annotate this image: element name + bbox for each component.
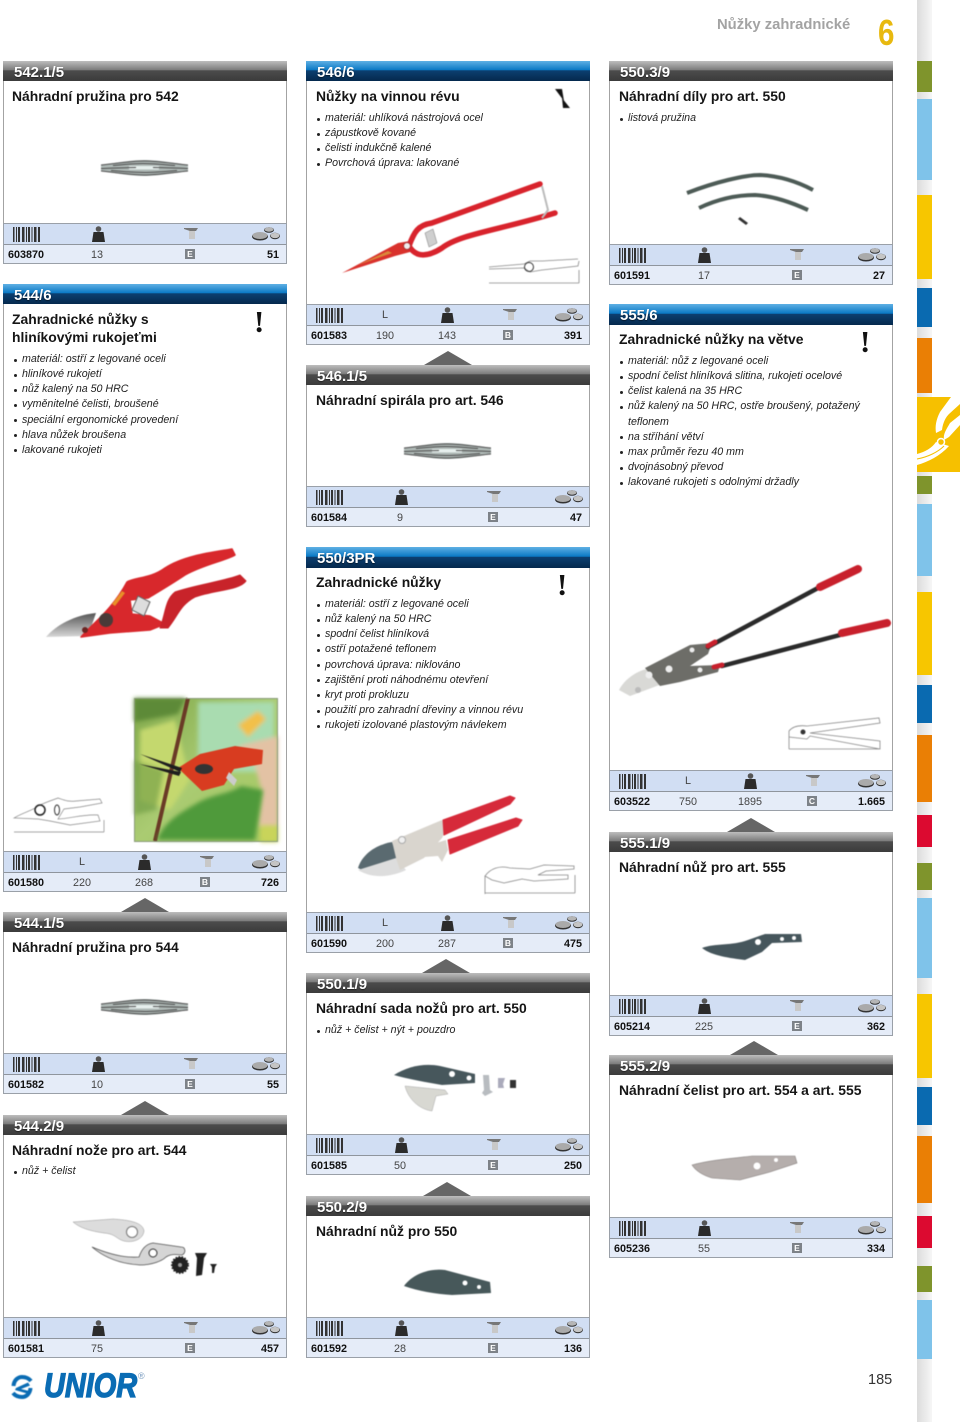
spec table: E bbox=[187, 249, 193, 259]
spec table: 601581 bbox=[8, 1343, 44, 1355]
feature list: materiál: ostří z legované oceli bbox=[22, 353, 166, 365]
header: 544.1/5 bbox=[14, 915, 64, 932]
feature list: na stříhání větví bbox=[628, 431, 704, 443]
arrow: 555.1/9 bbox=[727, 818, 775, 832]
spec table: 136 bbox=[564, 1343, 582, 1355]
spec table: 47 bbox=[570, 512, 582, 524]
arrow: 546.1/5 bbox=[424, 351, 472, 365]
spec table bbox=[609, 770, 893, 811]
feature list bbox=[14, 353, 179, 456]
spec table: 75 bbox=[91, 1343, 103, 1355]
header: 542.1/5 bbox=[14, 64, 64, 81]
spec table: 190 bbox=[376, 330, 394, 342]
title: Náhradní sada nožů pro art. 550 bbox=[316, 1000, 527, 1016]
feature list: materiál: ostří z legované oceli bbox=[325, 598, 469, 610]
spec table: B bbox=[202, 877, 208, 887]
header: 550.3/9 bbox=[620, 64, 670, 81]
header bbox=[3, 1115, 287, 1135]
feature list: ostří potažené teflonem bbox=[325, 643, 436, 655]
line drawing: loppers bbox=[788, 717, 881, 750]
spec table: 143 bbox=[438, 330, 456, 342]
feature list: materiál: uhlíková nástrojová ocel bbox=[325, 112, 483, 124]
spec table bbox=[3, 1317, 287, 1358]
header bbox=[3, 284, 287, 304]
feature list: speciální ergonomické provedení bbox=[22, 414, 178, 426]
arrow: 555.2/9 bbox=[730, 1041, 778, 1055]
header: 550.2/9 bbox=[317, 1199, 367, 1216]
header: 544.2/9 bbox=[14, 1118, 64, 1135]
feature list: nůž + čelist bbox=[22, 1165, 76, 1177]
spec table: 17 bbox=[698, 270, 710, 282]
spec table: 1895 bbox=[738, 796, 762, 808]
spec table: C bbox=[809, 796, 815, 806]
spec table: L bbox=[685, 775, 691, 787]
spec table bbox=[306, 1317, 590, 1358]
panel: 555.2/9 bbox=[609, 1055, 893, 1258]
panel: 555.1/9 bbox=[609, 832, 893, 1036]
icon: yellow chapter badge bbox=[916, 397, 960, 472]
panel: 555/6 bbox=[609, 304, 893, 811]
spec table bbox=[306, 912, 590, 953]
header: 544/6 bbox=[14, 287, 52, 304]
header: 550.1/9 bbox=[317, 976, 367, 993]
spec table: E bbox=[490, 512, 496, 522]
spec table bbox=[3, 1053, 287, 1094]
panel: 546.1/5 bbox=[306, 365, 590, 527]
spec table: 601591 bbox=[614, 270, 650, 282]
spec table: E bbox=[187, 1343, 193, 1353]
spec table: 601582 bbox=[8, 1079, 44, 1091]
spec table: 1.665 bbox=[858, 796, 885, 808]
header: 555/6 bbox=[620, 307, 658, 324]
warning icon: ! bbox=[254, 304, 264, 339]
spec table: 391 bbox=[564, 330, 582, 342]
header bbox=[306, 1196, 590, 1216]
feature list: teflonem bbox=[628, 416, 669, 428]
header bbox=[609, 832, 893, 852]
registered mark: ® bbox=[138, 1371, 145, 1381]
spec table: 268 bbox=[135, 877, 153, 889]
image: spring bbox=[403, 442, 492, 460]
photo: pruning vine bbox=[130, 694, 282, 846]
line drawing: secateurs bbox=[13, 797, 105, 833]
spec table: 362 bbox=[867, 1021, 885, 1033]
spec table: B bbox=[505, 330, 511, 340]
spec table: 50 bbox=[394, 1160, 406, 1172]
spec table: 603522 bbox=[614, 796, 650, 808]
panel: 544/6 bbox=[3, 284, 287, 892]
panel: 550.1/9 bbox=[306, 973, 590, 1175]
header: 550/3PR bbox=[317, 550, 375, 567]
panel: 550.2/9 bbox=[306, 1196, 590, 1358]
image: jaw bbox=[691, 1155, 798, 1181]
panel: 550/3PR bbox=[306, 547, 590, 953]
side navigation strip bbox=[917, 0, 932, 1422]
header bbox=[609, 61, 893, 81]
image: blade bbox=[404, 1268, 492, 1296]
image: blade parts bbox=[72, 1218, 218, 1277]
header: 555.1/9 bbox=[620, 835, 670, 852]
spec table: L bbox=[382, 309, 388, 321]
spec table: 601590 bbox=[311, 938, 347, 950]
logo mark bbox=[10, 1374, 34, 1400]
feature list: max průměr řezu 40 mm bbox=[628, 446, 744, 458]
title: Zahradnické nůžky s bbox=[12, 311, 149, 327]
feature list: zápustkově kované bbox=[325, 127, 416, 139]
spec table: E bbox=[187, 1079, 193, 1089]
arrow: 550.2/9 bbox=[423, 1182, 471, 1196]
arrow: 544.1/5 bbox=[121, 898, 169, 912]
header bbox=[609, 304, 893, 325]
feature list: materiál: nůž z legované oceli bbox=[628, 355, 768, 367]
feature list: kryt proti prokluzu bbox=[325, 689, 409, 701]
feature list: lakované rukojeti s odolnými držadly bbox=[628, 476, 799, 488]
spec table bbox=[306, 486, 590, 527]
spec table bbox=[609, 1217, 893, 1258]
warning icon: ! bbox=[557, 567, 567, 602]
spec table: 55 bbox=[698, 1243, 710, 1255]
feature list: spodní čelist hliníková bbox=[325, 628, 429, 640]
spec table: 601580 bbox=[8, 877, 44, 889]
feature list: rukojeti izolované plastovým návlekem bbox=[325, 719, 507, 731]
spec table bbox=[3, 223, 287, 264]
section heading: Nůžky zahradnické bbox=[717, 17, 850, 33]
header bbox=[306, 973, 590, 993]
spec table: 475 bbox=[564, 938, 582, 950]
spec table: 601585 bbox=[311, 1160, 347, 1172]
header: 555.2/9 bbox=[620, 1058, 670, 1075]
spec table: 605214 bbox=[614, 1021, 650, 1033]
spec table bbox=[609, 995, 893, 1036]
spec table: 603870 bbox=[8, 249, 44, 261]
spec table: 287 bbox=[438, 938, 456, 950]
spec table: 334 bbox=[867, 1243, 885, 1255]
spec table: 13 bbox=[91, 249, 103, 261]
title: Náhradní pružina pro 542 bbox=[12, 88, 179, 104]
title: Zahradnické nůžky bbox=[316, 574, 441, 590]
spec table: 750 bbox=[679, 796, 697, 808]
title: hliníkovými rukojeťmi bbox=[12, 329, 157, 345]
header bbox=[306, 365, 590, 385]
spec table: 220 bbox=[73, 877, 91, 889]
image: loppers bbox=[619, 564, 892, 696]
spec table bbox=[306, 1134, 590, 1175]
spec table: 457 bbox=[261, 1343, 279, 1355]
title: Nůžky na vinnou révu bbox=[316, 88, 460, 104]
title: Náhradní díly pro art. 550 bbox=[619, 88, 786, 104]
image: leaf springs bbox=[686, 172, 814, 226]
header bbox=[306, 547, 590, 568]
title: Náhradní nože pro art. 544 bbox=[12, 1142, 186, 1158]
feature list: dvojnásobný převod bbox=[628, 461, 723, 473]
image: spring bbox=[100, 160, 189, 176]
line drawing: pruner bbox=[484, 864, 576, 894]
spec table bbox=[306, 304, 590, 345]
feature list bbox=[317, 598, 523, 731]
image: red secateurs bbox=[46, 548, 248, 638]
feature list bbox=[317, 112, 484, 169]
title: Náhradní spirála pro art. 546 bbox=[316, 392, 504, 408]
spec table: 225 bbox=[695, 1021, 713, 1033]
spec table: E bbox=[794, 1021, 800, 1031]
spec table: 27 bbox=[873, 270, 885, 282]
page number: 185 bbox=[868, 1372, 892, 1388]
spec table: E bbox=[794, 270, 800, 280]
header: 546/6 bbox=[317, 64, 355, 81]
header bbox=[3, 912, 287, 932]
feature list: zajištění proti náhodnému otevření bbox=[325, 674, 488, 686]
spec table: L bbox=[382, 917, 388, 929]
title: Náhradní nůž pro 550 bbox=[316, 1223, 457, 1239]
header bbox=[609, 1055, 893, 1075]
title: Náhradní nůž pro art. 555 bbox=[619, 859, 786, 875]
feature list: hlava nůžek broušena bbox=[22, 429, 126, 441]
panel: 544.2/9 bbox=[3, 1115, 287, 1358]
spec table: 51 bbox=[267, 249, 279, 261]
image: blade set bbox=[394, 1064, 517, 1112]
panel: 544.1/5 bbox=[3, 912, 287, 1094]
image: spring bbox=[100, 998, 189, 1016]
title: Zahradnické nůžky na větve bbox=[619, 331, 804, 347]
header bbox=[306, 61, 590, 81]
image: blade bbox=[702, 933, 803, 961]
spec table: B bbox=[505, 938, 511, 948]
spec table: 10 bbox=[91, 1079, 103, 1091]
spec table: 9 bbox=[397, 512, 403, 524]
title: Náhradní pružina pro 544 bbox=[12, 939, 179, 955]
header bbox=[3, 61, 287, 81]
logo wordmark: UNIOR bbox=[44, 1367, 137, 1405]
feature list: Povrchová úprava: lakované bbox=[325, 157, 459, 169]
panel: 542.1/5 bbox=[3, 61, 287, 264]
panel: 550.3/9 bbox=[609, 61, 893, 285]
feature list: vyměnitelné čelisti, broušené bbox=[22, 398, 159, 410]
feature list bbox=[620, 355, 860, 488]
panel: 546/6 bbox=[306, 61, 590, 345]
spec table: 601584 bbox=[311, 512, 347, 524]
feature list: povrchová úprava: niklováno bbox=[325, 659, 460, 671]
feature list: čelisti indukčně kalené bbox=[325, 142, 431, 154]
feature list: nůž kalený na 50 HRC bbox=[22, 383, 128, 395]
spec table bbox=[3, 851, 287, 892]
feature list: hliníkové rukojetí bbox=[22, 368, 102, 380]
feature list: čelist kalená na 35 HRC bbox=[628, 385, 742, 397]
feature list: lakované rukojeti bbox=[22, 444, 102, 456]
spec table: 601583 bbox=[311, 330, 347, 342]
spec table: 601592 bbox=[311, 1343, 347, 1355]
spec table: E bbox=[490, 1160, 496, 1170]
title bbox=[12, 311, 157, 345]
image: red vine shears bbox=[342, 180, 558, 274]
chapter number: 6 bbox=[878, 12, 894, 53]
title: Náhradní čelist pro art. 554 a art. 555 bbox=[619, 1082, 861, 1098]
logo: UNIOR bbox=[10, 1367, 145, 1405]
feature list: nůž + čelist + nýt + pouzdro bbox=[325, 1024, 455, 1036]
spec table: L bbox=[79, 856, 85, 868]
warning icon: ! bbox=[860, 324, 870, 359]
spec table: 605236 bbox=[614, 1243, 650, 1255]
spec table: E bbox=[794, 1243, 800, 1253]
spec table bbox=[609, 244, 893, 285]
spec table: E bbox=[490, 1343, 496, 1353]
feature list: spodní čelist hliníková slitina, rukojeti ocelové bbox=[628, 370, 842, 382]
icon: forged tool mark bbox=[554, 88, 570, 109]
line drawing: shears bbox=[488, 258, 580, 284]
feature list: listová pružina bbox=[628, 112, 696, 124]
spec table: 200 bbox=[376, 938, 394, 950]
feature list: použití pro zahradní dřeviny a vinnou révu bbox=[325, 704, 523, 716]
header: 546.1/5 bbox=[317, 368, 367, 385]
arrow: 544.2/9 bbox=[121, 1101, 169, 1115]
spec table: 726 bbox=[261, 877, 279, 889]
spec table: 250 bbox=[564, 1160, 582, 1172]
image: anvil pruner bbox=[358, 794, 524, 876]
feature list: nůž kalený na 50 HRC, ostře broušený, potažený bbox=[628, 400, 860, 412]
spec table: 55 bbox=[267, 1079, 279, 1091]
spec table: 28 bbox=[394, 1343, 406, 1355]
arrow: 550.1/9 bbox=[422, 959, 470, 973]
feature list: nůž kalený na 50 HRC bbox=[325, 613, 431, 625]
